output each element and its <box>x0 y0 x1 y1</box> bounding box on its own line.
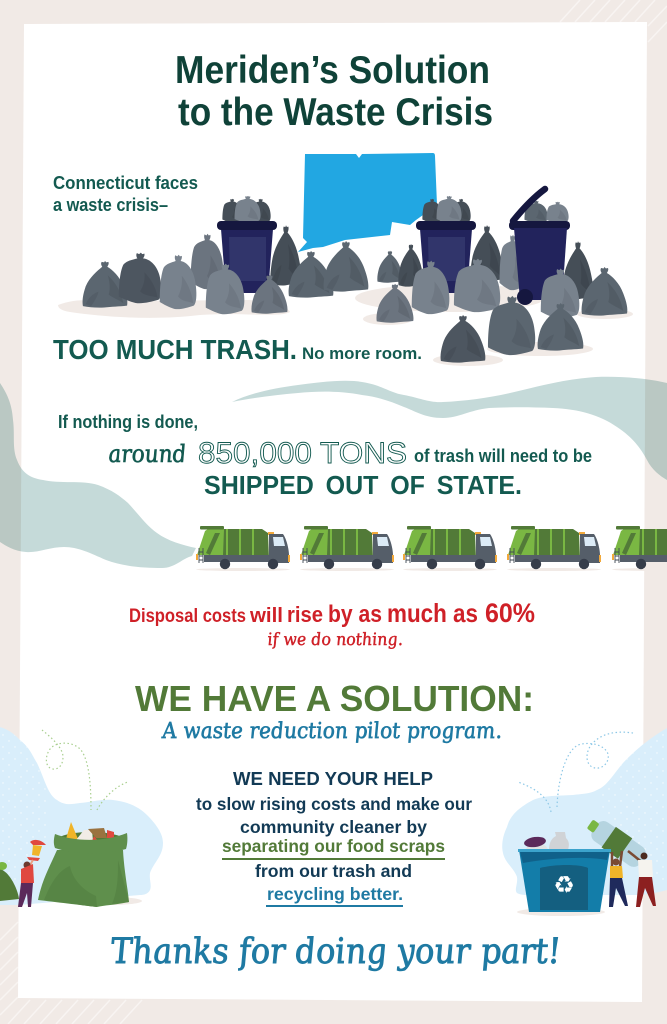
closing line: thanks: Thanks for doing your part! <box>109 931 563 972</box>
plastic bottle <box>549 832 569 850</box>
text: disposal costs warning: by as <box>328 601 382 628</box>
highlight: recycling better: recycling better. <box>267 884 403 904</box>
text: we need your help <box>196 769 472 907</box>
text: we need your help: to slow rising costs and make our <box>196 794 472 814</box>
title: Meriden’s Solution <box>175 49 490 92</box>
text: if nothing is done: of trash will need to be <box>414 446 592 466</box>
text: disposal costs warning: 60% <box>485 598 535 628</box>
dotted recycling arc <box>518 732 633 812</box>
text: too much trash: TOO MUCH TRASH. <box>53 334 297 365</box>
text: Connecticut faces a waste crisis: a waste crisis– <box>53 195 168 215</box>
text: disposal costs warning: much as <box>387 598 478 628</box>
illustration: trash pile left <box>58 196 368 318</box>
text: if nothing is done: If nothing is done, <box>58 412 198 432</box>
blue recycling bin <box>518 849 611 912</box>
food scraps <box>58 822 124 844</box>
text: if nothing is done <box>58 412 592 500</box>
bags on middle bin <box>422 196 471 223</box>
text: we need your help: from our trash and <box>255 861 412 881</box>
text: we need your help: WE NEED YOUR HELP <box>233 769 433 789</box>
text: Connecticut faces a waste crisis: Connecticut faces <box>53 173 198 193</box>
text: if nothing is done: around <box>107 440 188 468</box>
bags in open bin <box>524 201 569 223</box>
person holding apple core <box>18 840 46 907</box>
dotted food arc <box>42 730 128 810</box>
text: disposal costs warning: will <box>249 605 283 627</box>
big green bottle <box>583 814 649 871</box>
ground shadows <box>355 284 633 366</box>
person in yellow <box>609 851 628 907</box>
illustration: recycling bin <box>502 728 667 916</box>
title <box>175 49 493 134</box>
subheading: pilot program: A waste reduction pilot program. <box>160 719 503 744</box>
title: to the Waste Crisis <box>178 91 493 134</box>
text: if nothing is done: 850,000 TONS <box>198 437 407 470</box>
bags on bin <box>222 196 271 223</box>
illustration: food scraps bag <box>0 727 163 907</box>
text: too much trash: No more room. <box>302 344 422 363</box>
recycling symbol: ♻ <box>553 871 575 899</box>
illustration: trash pile right <box>355 189 633 366</box>
text: if nothing is done: SHIPPED OUT OF STATE. <box>204 470 522 500</box>
text: Connecticut faces a waste crisis <box>53 173 198 215</box>
wave: left teal blob <box>0 383 196 568</box>
open bin with lid <box>509 189 570 305</box>
heading: we have a solution: WE HAVE A SOLUTION: <box>135 678 534 719</box>
jar <box>523 836 548 850</box>
text: disposal costs warning <box>129 598 535 650</box>
wave: right teal swoosh <box>232 377 667 480</box>
text: disposal costs warning: rise <box>287 602 323 627</box>
middle bin <box>416 221 476 293</box>
sack <box>38 833 129 907</box>
text: disposal costs warning: Disposal costs <box>129 606 246 627</box>
map: Connecticut <box>298 153 437 252</box>
illustration: row of garbage trucks <box>196 526 667 571</box>
text: disposal costs warning: if we do nothing. <box>267 630 403 650</box>
person in white <box>628 851 656 907</box>
highlight: separating food scraps: separating our food scraps <box>222 836 445 856</box>
small bag at edge <box>0 869 19 901</box>
bin <box>217 221 277 293</box>
text: we need your help: community cleaner by <box>240 817 427 837</box>
